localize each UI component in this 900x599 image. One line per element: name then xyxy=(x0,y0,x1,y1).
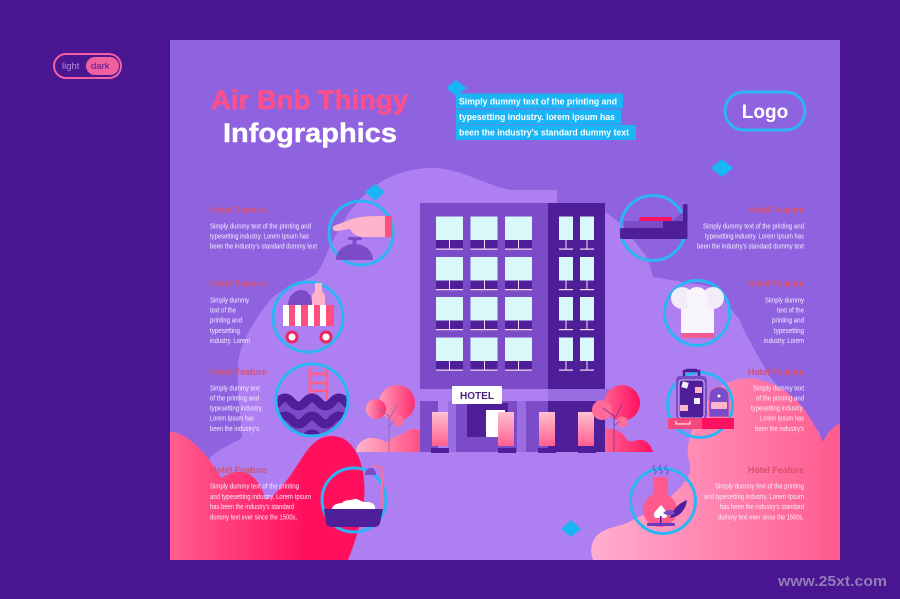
feature 1: left text: typesetting industry. Lorem Ipsum has xyxy=(210,234,309,240)
feature 2: left text xyxy=(210,278,267,345)
hotel building xyxy=(420,203,610,453)
feature 5: right text: typesetting industry. Lorem Ipsum has xyxy=(705,234,804,240)
icon: bathtub xyxy=(322,466,386,532)
feature 2: left text: Simply dummy xyxy=(210,298,249,304)
feature 5: right text xyxy=(697,205,804,250)
feature 7: right text: Hotel Feature xyxy=(748,367,804,377)
highlighted intro text xyxy=(456,94,636,140)
hotel sign: HOTEL xyxy=(460,390,495,402)
title: Infographics xyxy=(223,118,397,148)
toggle: light and dark xyxy=(54,54,121,78)
background blob: lilac hill xyxy=(210,168,823,560)
feature 3: left text: of the printing and xyxy=(210,396,259,402)
feature 8: right text: and typesetting industry. Lorem Ipsum xyxy=(704,494,804,501)
ground floor xyxy=(420,401,605,453)
watermark: www.25xt.com xyxy=(777,574,887,590)
icon: luggage xyxy=(668,370,734,438)
feature 8: right text: dummy text ever since the 1500s, xyxy=(718,514,804,522)
toggle: light and dark: dark xyxy=(91,61,110,72)
feature 1: left text: Hotel Feature xyxy=(210,205,267,215)
feature 4: left text: Hotel Feature xyxy=(210,465,267,475)
feature 6: right text: industry. Lorem xyxy=(764,338,804,345)
panel: infographic background xyxy=(170,40,840,560)
tree and bush: right xyxy=(592,385,653,452)
feature 7: right text xyxy=(748,367,804,433)
feature 7: right text: of the printing and xyxy=(756,396,804,402)
feature 7: right text: Simply dummy text xyxy=(753,386,804,392)
hotel sign xyxy=(452,386,502,404)
feature 5: right text: been the industry's standard dummy text xyxy=(697,244,804,250)
title xyxy=(211,85,408,148)
feature 1: left text xyxy=(210,205,317,250)
feature 7: right text: Lorem Ipsum has xyxy=(760,416,804,422)
upper floors xyxy=(420,203,610,401)
feature 7: right text: been the industry's xyxy=(755,426,804,433)
feature 3: left text: Hotel Feature xyxy=(210,367,267,377)
toggle: light and dark: light xyxy=(62,61,80,72)
feature 4: left text: dummy text ever since the 1500s, xyxy=(210,514,297,522)
feature 8: right text: Simply dummy text of the printing xyxy=(715,484,804,490)
feature 4: left text xyxy=(210,465,311,522)
icon: aroma flask xyxy=(630,465,696,534)
logo badge xyxy=(725,92,805,130)
feature 1: left text: been the industry's standard dummy text xyxy=(210,244,317,250)
feature 3: left text xyxy=(210,367,267,433)
feature 4: left text: and typesetting industry. Lorem Ipsum xyxy=(210,494,311,501)
icon: chef hat xyxy=(664,280,730,346)
diamond accents xyxy=(365,80,733,537)
logo badge: Logo xyxy=(742,102,788,123)
feature 8: right text: Hotel Feature xyxy=(748,465,804,475)
icon: bed xyxy=(620,196,688,260)
feature 7: right text: typesetting industry. xyxy=(751,406,804,412)
highlighted intro text: been the industry's standard dummy text xyxy=(459,128,629,138)
feature 6: right text xyxy=(748,278,804,345)
feature 6: right text: Hotel Feature xyxy=(748,278,804,288)
highlighted intro text: typesetting industry. lorem ipsum has xyxy=(459,112,615,122)
feature 2: left text: text of the xyxy=(210,308,236,314)
feature 2: left text: Hotel Feature xyxy=(210,278,267,288)
feature 2: left text: industry. Lorem xyxy=(210,338,250,345)
feature 3: left text: typesetting industry. xyxy=(210,406,263,412)
feature 2: left text: typesetting xyxy=(210,328,240,335)
icon: swimming pool xyxy=(274,362,350,438)
feature 3: left text: Lorem Ipsum has xyxy=(210,416,254,422)
feature 6: right text: printing and xyxy=(772,318,804,324)
feature 1: left text: Simply dummy text of the printing and xyxy=(210,224,311,230)
highlighted intro text: Simply dummy text of the printing and xyxy=(459,96,617,106)
windows xyxy=(436,216,594,371)
icon: food cart xyxy=(273,282,343,352)
tree and bush: left xyxy=(356,385,420,452)
background blob: left pink xyxy=(170,432,364,560)
icon: hand and service bell xyxy=(329,201,393,265)
feature 6: right text: text of the xyxy=(777,308,804,314)
feature 4: left text: has been the industry's standard xyxy=(210,504,294,511)
background blob: right pink xyxy=(591,378,840,560)
feature 2: left text: printing and xyxy=(210,318,242,324)
feature 3: left text: Simply dummy text xyxy=(210,386,260,392)
feature 5: right text: Hotel Feature xyxy=(748,205,804,215)
feature 3: left text: been the industry's xyxy=(210,426,259,433)
feature 6: right text: typesetting xyxy=(774,328,804,335)
title: Air Bnb Thingy xyxy=(211,85,408,115)
feature 6: right text: Simply dummy xyxy=(765,298,804,304)
feature 4: left text: Simply dummy text of the printing xyxy=(210,484,299,490)
feature 8: right text xyxy=(704,465,804,522)
feature 5: right text: Simply dummy text of the printing and xyxy=(703,224,804,230)
feature 8: right text: has been the industry's standard xyxy=(720,504,804,511)
